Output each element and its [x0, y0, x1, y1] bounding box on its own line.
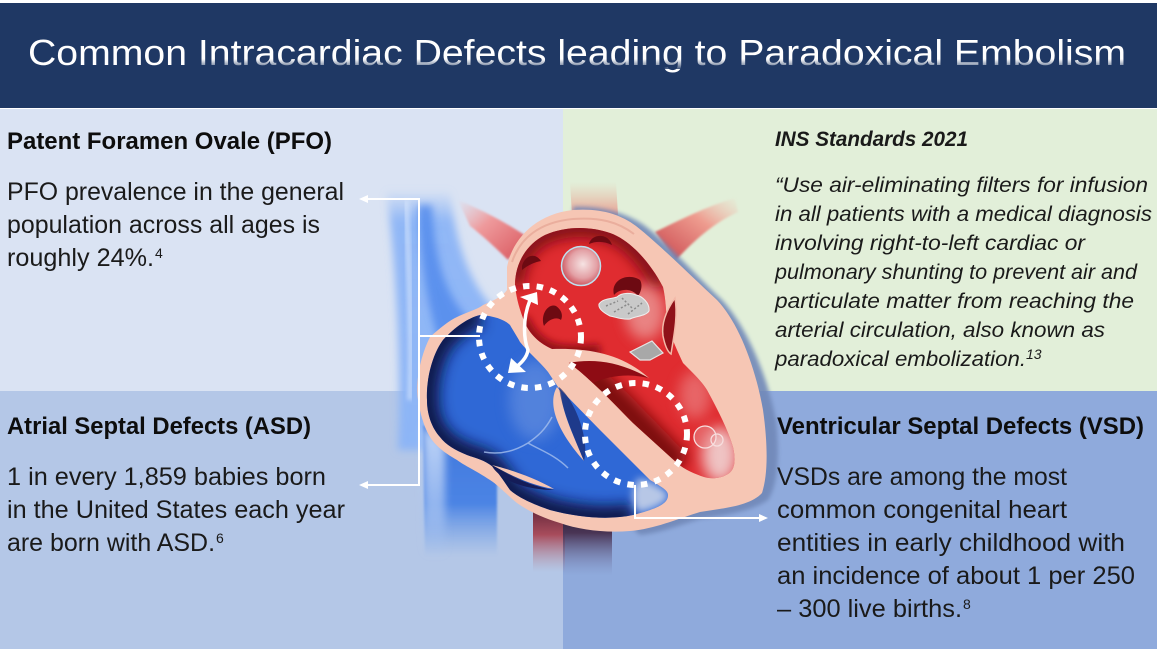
text block: PFO: Patent Foramen Ovale (PFO)	[7, 128, 332, 155]
large air bubble	[562, 246, 600, 286]
small air bubbles	[694, 426, 723, 448]
text block: INS Standards quote: pulmonary shunting to prevent air and	[774, 261, 1138, 284]
text block: ASD: 1 in every 1,859 babies born	[7, 463, 326, 491]
text block: INS Standards quote: paradoxical embolization.	[774, 348, 1026, 371]
superior vena cava	[386, 190, 500, 450]
connector arrow: ASD	[359, 336, 419, 489]
right atrium and ventricle	[426, 315, 668, 518]
text block: PFO	[7, 128, 344, 272]
text block: INS Standards quote: in all patients with a medical diagnosis	[775, 203, 1153, 226]
pulmonary vein left	[458, 200, 526, 260]
title banner: Common Intracardiac Defects leading to Paradoxical Embolism	[28, 32, 1126, 73]
text block: INS Standards quote: INS Standards 2021	[775, 128, 968, 151]
dashed circle: ventricular septum	[585, 383, 687, 485]
text block: PFO: roughly 24%.	[7, 244, 154, 272]
text block: PFO: population across all ages is	[7, 211, 320, 239]
text block: VSD: Ventricular Septal Defects (VSD)	[777, 413, 1144, 440]
heart shadow edge	[573, 207, 778, 535]
double-headed shunt arrow	[508, 292, 538, 373]
pulmonary vein right	[655, 198, 738, 260]
panel: INS Standards background	[563, 109, 1157, 391]
pulmonary vein top	[570, 182, 618, 215]
panel: PFO background	[0, 109, 563, 391]
text block: INS Standards quote: “Use air-eliminating filters for infusion	[775, 174, 1148, 197]
grey embolus	[630, 341, 663, 360]
text block: INS Standards quote	[774, 128, 1153, 371]
text block: VSD: 8	[963, 596, 971, 612]
heart wall	[417, 210, 767, 532]
panel: ASD background	[0, 391, 563, 649]
particulate matter	[599, 293, 649, 319]
mitral leaflet	[552, 349, 649, 378]
papillary slit	[663, 298, 676, 354]
text block: INS Standards quote: involving right-to-left cardiac or	[775, 232, 1086, 255]
text block: VSD: an incidence of about 1 per 250	[777, 562, 1135, 590]
tricuspid leaflet	[553, 387, 585, 461]
chordae	[484, 417, 568, 468]
title banner	[0, 3, 1157, 108]
text block: INS Standards quote: particulate matter from reaching the	[774, 290, 1134, 313]
text block: ASD: Atrial Septal Defects (ASD)	[7, 413, 311, 440]
text block: INS Standards quote: 13	[1026, 346, 1042, 362]
connector arrow: PFO	[359, 195, 480, 336]
text block: VSD: common congenital heart	[777, 496, 1067, 524]
heart illustration	[386, 182, 778, 576]
text block: PFO: 4	[155, 245, 163, 261]
text block: VSD	[777, 413, 1144, 623]
wall highlight	[512, 219, 634, 262]
text block: INS Standards quote: arterial circulation, also known as	[775, 319, 1106, 342]
dashed circle: atrial septum	[479, 286, 581, 388]
inferior vena cava	[423, 425, 497, 556]
text block: VSD: – 300 live births.	[777, 595, 962, 623]
text block: VSD: entities in early childhood with	[777, 529, 1125, 557]
text block: ASD	[7, 413, 345, 557]
pulmonary vein openings	[522, 236, 641, 326]
text block: ASD: 6	[216, 530, 224, 546]
lower slit shadow	[492, 466, 554, 490]
connector arrow: VSD	[635, 485, 768, 522]
text block: ASD: are born with ASD.	[7, 529, 215, 557]
left atrium and ventricle	[510, 222, 740, 484]
text block: VSD: VSDs are among the most	[777, 463, 1067, 491]
lower slit	[492, 465, 554, 489]
text block: PFO: PFO prevalence in the general	[7, 178, 344, 206]
text block: ASD: in the United States each year	[7, 496, 345, 524]
aorta stub	[533, 510, 612, 576]
panel: VSD background	[563, 391, 1157, 649]
